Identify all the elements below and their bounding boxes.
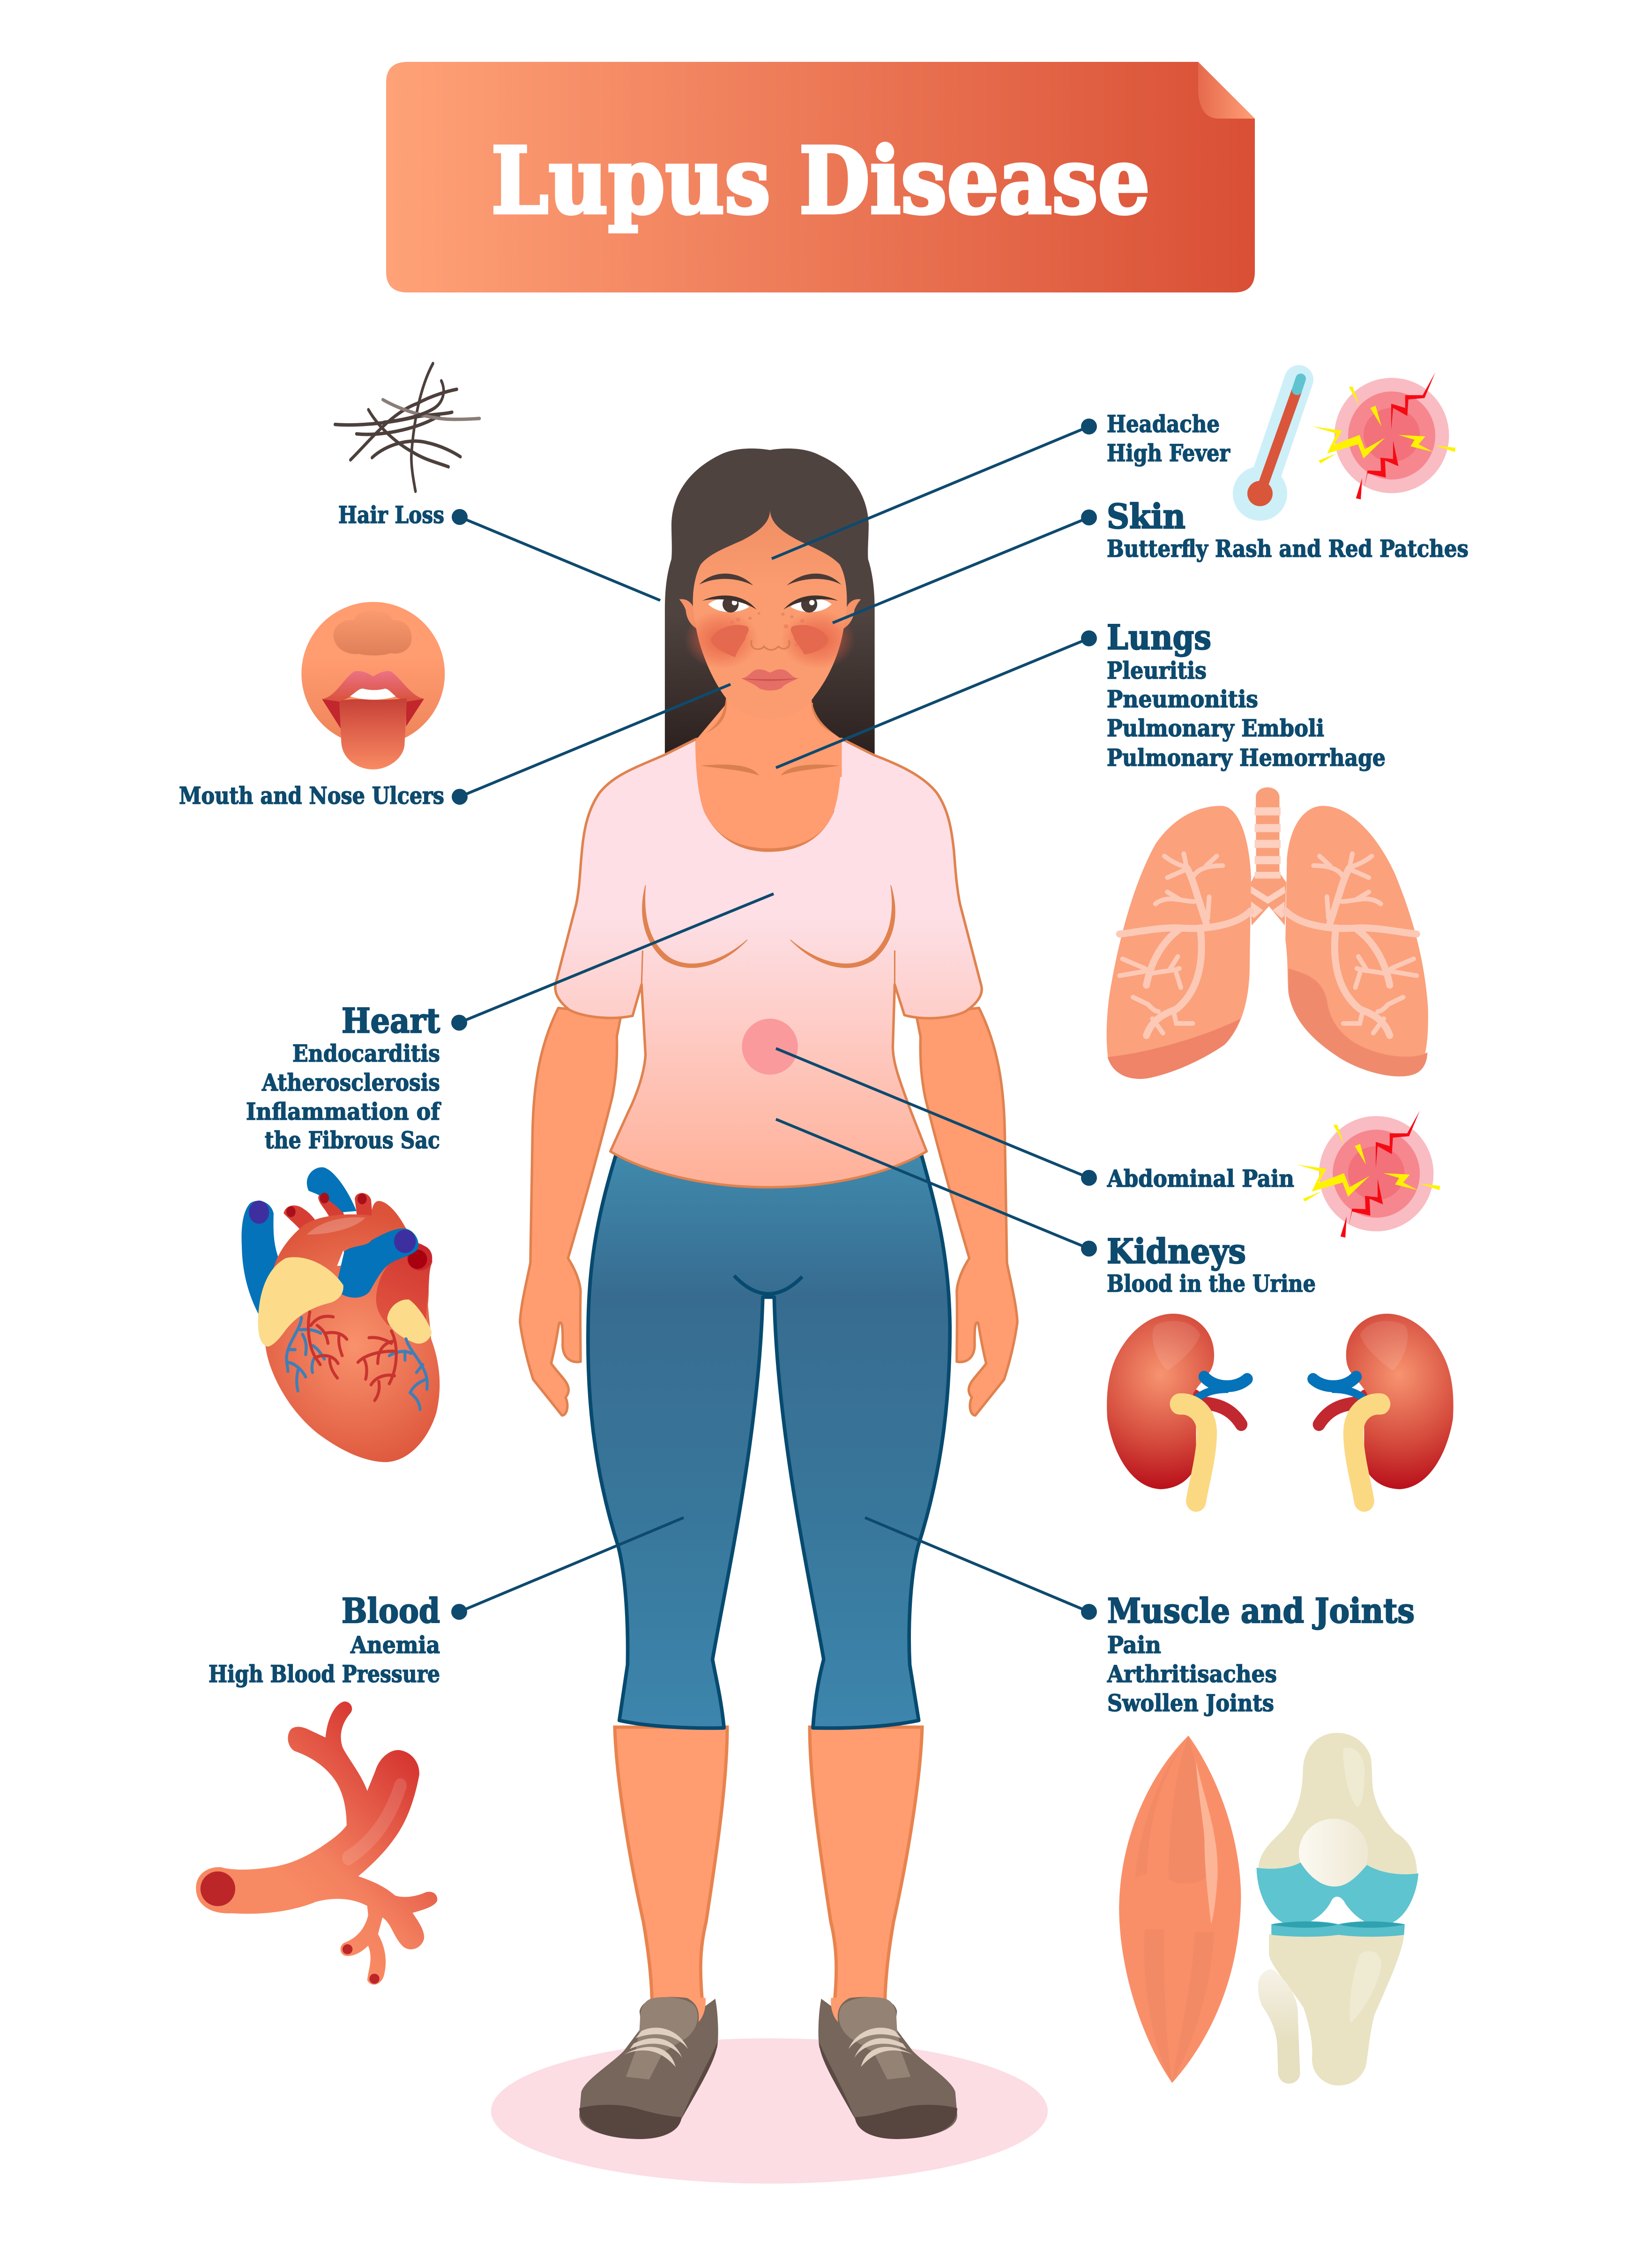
face (693, 510, 847, 719)
sub-items (246, 1040, 441, 1154)
sub-item: Butterfly Rash and Red Patches (1107, 535, 1469, 562)
icon: knee joint (1257, 1733, 1418, 2086)
red arteries (308, 1312, 396, 1400)
label: abdominal pain: Abdominal Pain (1107, 1165, 1294, 1192)
panel: heart text (246, 1001, 441, 1154)
label: hair loss: Hair Loss (338, 501, 444, 529)
sub-items: Arthritisaches (1107, 1660, 1277, 1688)
icon: abdominal pain burst (1297, 1111, 1440, 1238)
panel: skin text (1107, 496, 1469, 562)
rings (1334, 378, 1449, 493)
line: skin (833, 517, 1089, 623)
line: blood (459, 1518, 684, 1612)
sub-items: the Fibrous Sac (265, 1126, 440, 1154)
teeth (350, 689, 396, 700)
sub-items: Endocarditis (292, 1040, 440, 1067)
yellow fat (258, 1257, 343, 1347)
sub-item: Blood in the Urine (1107, 1270, 1316, 1297)
line: heart (459, 894, 774, 1023)
banner shape (386, 62, 1255, 292)
figure: woman (520, 449, 1017, 2139)
back vessels (242, 1201, 279, 1314)
right kidney (1313, 1314, 1454, 1501)
fibula (1258, 1969, 1300, 2084)
arms and hands (520, 1008, 1017, 1415)
ears (679, 599, 861, 629)
highlight (349, 1786, 401, 1858)
icon: kidneys (1107, 1314, 1454, 1501)
hair (665, 449, 875, 754)
title banner (386, 62, 1255, 292)
rings (1319, 1116, 1433, 1231)
folded corner (1198, 62, 1255, 119)
icon: muscle (1119, 1736, 1241, 2083)
sub-items: Atherosclerosis (261, 1069, 440, 1096)
muscle body (1119, 1736, 1241, 2083)
eyes (702, 596, 838, 613)
line: mouth ulcers (460, 684, 731, 797)
line: abdominal (776, 1048, 1089, 1178)
face circle (301, 602, 445, 745)
bronchial tree left (1119, 853, 1251, 1035)
sub-items: Pulmonary Hemorrhage (1107, 744, 1386, 771)
heading: Skin (1107, 496, 1185, 536)
bronchial tree right (1286, 853, 1416, 1035)
tongue (339, 698, 407, 770)
eyebrows (699, 574, 841, 585)
nose (751, 640, 790, 650)
fibres (1135, 1736, 1214, 2083)
lips (741, 669, 799, 690)
sub-items (1107, 1631, 1277, 1717)
icon: hair strands (335, 364, 479, 491)
blue veins (286, 1317, 427, 1409)
icon: mouth and nose (301, 602, 445, 770)
red bolts (1356, 373, 1435, 500)
patella (1299, 1819, 1368, 1887)
blue vessel (338, 1228, 418, 1298)
mouth cavity (322, 698, 424, 730)
abdominal pain spot (742, 1018, 798, 1075)
lower legs (615, 1727, 922, 2020)
sub-items: Pneumonitis (1107, 685, 1258, 713)
line: kidneys (776, 1119, 1089, 1249)
heading: Blood (342, 1591, 440, 1631)
label: mouth and nose ulcers: Mouth and Nose Ulcers (179, 782, 444, 809)
aorta (376, 1243, 432, 1325)
nose (334, 611, 411, 656)
collarbones (701, 764, 840, 776)
sub-items: High Blood Pressure (209, 1660, 440, 1688)
heading: Lungs (1107, 617, 1211, 657)
floor shadow ellipse (491, 2038, 1048, 2184)
line: lungs (776, 638, 1089, 768)
leader lines and dots (451, 419, 1097, 1620)
trachea (1250, 787, 1286, 925)
sub-items: Pleuritis (1107, 657, 1207, 684)
panel: kidneys text (1107, 1231, 1316, 1297)
dots (451, 419, 1097, 1620)
right lung (1285, 806, 1428, 1077)
chest lines (642, 885, 747, 967)
sub-items (1107, 657, 1386, 771)
tibia (1269, 1934, 1404, 2086)
heart body (264, 1201, 440, 1462)
neck (698, 696, 842, 777)
glow (1233, 380, 1299, 521)
yellow bolts (1312, 387, 1455, 464)
line: muscle (865, 1518, 1089, 1612)
yellow bolts (1297, 1125, 1440, 1202)
icon: thermometer (1233, 379, 1301, 521)
cartilage (1257, 1863, 1418, 1925)
left lung (1107, 806, 1251, 1079)
icon: heart (242, 1167, 440, 1462)
trousers (588, 1155, 950, 1728)
label: headache: Headache (1107, 410, 1220, 438)
heading: Kidneys (1107, 1231, 1246, 1271)
heading: Muscle and Joints (1107, 1591, 1415, 1631)
label: high fever: High Fever (1107, 439, 1230, 467)
icon: lungs (1107, 787, 1428, 1079)
panel: lungs text (1107, 617, 1386, 771)
sub-items (209, 1631, 440, 1688)
title: Lupus Disease (491, 127, 1150, 234)
meniscus (1271, 1921, 1405, 1937)
bulb (1247, 481, 1273, 506)
sub-items: Pulmonary Emboli (1107, 714, 1324, 742)
head and face (679, 510, 861, 777)
icon: artery (196, 1701, 437, 1984)
sub-items: Swollen Joints (1107, 1689, 1274, 1717)
vessel (196, 1701, 437, 1984)
butterfly rash (684, 610, 855, 669)
lips (322, 671, 425, 702)
sub-items: Inflammation of (246, 1098, 441, 1125)
line: hair loss (460, 517, 660, 600)
icon: headache pain burst (1312, 373, 1455, 500)
mercury (1260, 390, 1297, 494)
chest skin (695, 703, 842, 848)
shirt (555, 703, 982, 1187)
heading: Heart (342, 1001, 440, 1040)
sub-items: Anemia (350, 1631, 440, 1659)
sub-items: Pain (1107, 1631, 1161, 1659)
line: headache (772, 427, 1089, 559)
left kidney (1107, 1314, 1247, 1501)
panel: blood text (209, 1591, 440, 1688)
highlight (1196, 1761, 1218, 1924)
red bolts (1341, 1111, 1420, 1238)
neckline shadow (704, 811, 835, 852)
panel: muscle and joints text (1107, 1591, 1415, 1717)
femur (1258, 1733, 1417, 1876)
shoes (579, 1997, 957, 2139)
openings (201, 1871, 380, 1984)
panel: headache and fever text (1107, 410, 1230, 467)
